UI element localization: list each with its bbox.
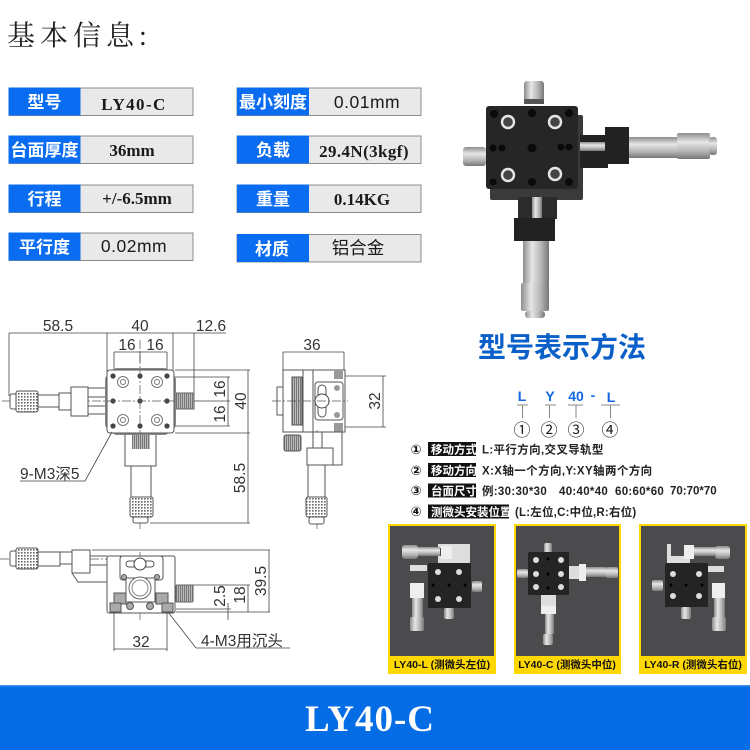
- bottom slider: [514, 197, 557, 241]
- front center line: [0, 552, 140, 620]
- plate: [665, 563, 708, 607]
- spec: model: [8, 88, 193, 116]
- side center line: [272, 401, 348, 530]
- spec: travel: 行程: [28, 190, 62, 209]
- spec: platform thickness: 台面厚度: [10, 140, 78, 160]
- callout: 4-M3 counterbore: 4-M3用沉头: [201, 632, 283, 650]
- left micrometer: [410, 565, 427, 631]
- callout: 4-M3 counterbore: [168, 612, 290, 650]
- circled numbers: ①: [514, 421, 530, 440]
- row 3: platform size: 60:60*60: [615, 486, 664, 498]
- circled numbers: ③: [568, 421, 584, 440]
- row 2: movement direction: X:X轴一个方向,Y:XY轴两个方向: [482, 464, 653, 478]
- circled numbers: ④: [602, 421, 618, 440]
- spec: material: 铝合金: [332, 238, 384, 258]
- front dimension lines: [92, 550, 270, 651]
- row 4: micrometer position: [410, 504, 636, 520]
- dimension lines top: [9, 333, 226, 396]
- bottom micrometer: [541, 595, 556, 645]
- spec: material: 材质: [255, 239, 289, 259]
- footer banner: [0, 685, 750, 750]
- side lower micrometer: [284, 432, 342, 524]
- left knob: [463, 147, 486, 166]
- front labels: 39.5: [253, 566, 270, 596]
- code letters: L: [518, 388, 527, 404]
- center lines: [2, 340, 198, 530]
- code letters: 40: [568, 388, 584, 404]
- row 3: platform size: 40:40*40: [559, 486, 608, 498]
- product photo: XY stage with micrometers: [463, 81, 717, 318]
- row 1: movement type: ①: [410, 443, 422, 458]
- front body: [107, 556, 175, 613]
- code letters: L: [607, 389, 616, 405]
- row 3: platform size: 例:30:30*30: [482, 484, 547, 498]
- front labels: [132, 566, 270, 651]
- spec: platform thickness: 36mm: [109, 141, 155, 160]
- photo card: LY40-L: [388, 524, 496, 674]
- top-view labels: [43, 318, 250, 493]
- row 4: micrometer position: (L:左位,C:中位,R:右位): [515, 505, 636, 519]
- upper micrometer: [402, 544, 470, 563]
- front labels: 18: [232, 586, 249, 604]
- model code diagram: [514, 387, 620, 440]
- top-view labels: 16: [212, 405, 229, 423]
- drawing: top view: [2, 318, 250, 530]
- row 2: movement direction: [410, 463, 653, 479]
- spec: model: LY40-C: [101, 95, 167, 114]
- code letters: -: [591, 387, 596, 403]
- drawing: front view: [0, 548, 290, 651]
- code letters: Y: [545, 388, 555, 404]
- top-view labels: 16: [212, 380, 229, 398]
- plate: [528, 552, 569, 595]
- circled numbers: [514, 421, 618, 440]
- row 3: platform size: ③: [410, 484, 422, 499]
- spec: model: 型号: [28, 93, 62, 112]
- side body: [277, 370, 345, 432]
- drawing: side view: [272, 337, 386, 530]
- row 3: platform size: [410, 484, 717, 499]
- knobs: [652, 580, 691, 619]
- notation list: [410, 442, 717, 520]
- right micrometer: [707, 566, 726, 631]
- top-view labels: 16: [146, 337, 164, 354]
- row 1: movement type: [410, 442, 604, 458]
- dimension lines right: [150, 370, 250, 523]
- front labels: 32: [132, 634, 150, 651]
- top-view labels: 58.5: [232, 463, 249, 493]
- title: 基本信息:: [7, 20, 152, 52]
- spec: material: [237, 234, 421, 262]
- bottom micrometer: [521, 241, 549, 318]
- side labels: [303, 337, 384, 410]
- right micrometer: [568, 564, 618, 581]
- top-view labels: 16: [118, 337, 136, 354]
- spec: parallelism: 0.02mm: [101, 236, 167, 256]
- row 1: movement type: 移动方式: [431, 442, 477, 456]
- stage base: [490, 115, 583, 200]
- top-view labels: 12.6: [196, 318, 226, 335]
- left micrometer: [10, 387, 107, 416]
- bottom micrometer: [125, 433, 156, 523]
- front micrometer: [10, 548, 107, 582]
- top-view labels: 40: [233, 392, 250, 410]
- spec: minimum scale: 最小刻度: [239, 92, 307, 112]
- spec: parallelism: [8, 232, 193, 260]
- row 4: micrometer position: 测微头安装位置: [431, 505, 512, 519]
- spec: parallelism: 平行度: [19, 238, 70, 257]
- side dimension lines: [283, 352, 386, 427]
- spec: weight: [237, 184, 421, 212]
- top knob: [524, 81, 544, 101]
- callout: 9-M3 holes: 9-M3深5: [20, 465, 79, 483]
- row 3: platform size: 70:70*70: [670, 486, 717, 498]
- row 1: movement type: L:平行方向,交叉导轨型: [482, 442, 604, 456]
- knobs: [517, 543, 552, 578]
- caption: LY40-L (测微头左位): [394, 658, 490, 671]
- side labels: 32: [367, 392, 384, 410]
- panel: specification table: [8, 88, 421, 262]
- circled numbers: ②: [540, 421, 558, 440]
- front knob: [176, 585, 193, 602]
- right micrometer: [629, 133, 717, 159]
- spec: travel: [8, 184, 193, 212]
- heading: model notation: 型号表示方法: [478, 332, 646, 363]
- callout: 9-M3 holes: [20, 432, 112, 483]
- spec: travel: +/-6.5mm: [102, 189, 172, 208]
- right slider: [580, 127, 629, 168]
- knobs: [444, 581, 482, 619]
- code brackets: [517, 405, 620, 418]
- top-view labels: 40: [131, 318, 149, 335]
- row 2: movement direction: 移动方向: [431, 464, 477, 478]
- plate: [428, 563, 471, 608]
- right knob: [176, 393, 194, 409]
- front labels: 2.5: [212, 585, 229, 607]
- upper micrometer: [667, 544, 730, 563]
- spec: weight: 重量: [256, 190, 290, 209]
- spec: load: 负载: [256, 141, 290, 160]
- photo card: LY40-R: [639, 524, 747, 674]
- photo card: LY40-C: [514, 524, 621, 674]
- spec: load: 29.4N(3kgf): [319, 142, 409, 161]
- spec: minimum scale: [237, 88, 421, 116]
- top plate with holes: [486, 106, 578, 189]
- spec: weight: 0.14KG: [334, 190, 390, 209]
- caption: LY40-R (测微头右位): [644, 658, 742, 671]
- top-view labels: 58.5: [43, 318, 73, 335]
- stage plate: [105, 368, 176, 435]
- row 3: platform size: 台面尺寸: [431, 484, 477, 498]
- side labels: 36: [303, 337, 321, 354]
- row 2: movement direction: ②: [410, 464, 422, 479]
- banner title: LY40-C: [305, 699, 435, 740]
- caption: LY40-C (测微头中位): [518, 658, 616, 671]
- spec: load: [237, 136, 421, 164]
- row 4: micrometer position: ④: [410, 505, 422, 520]
- code letters: [518, 387, 616, 405]
- spec: minimum scale: 0.01mm: [334, 92, 400, 112]
- spec: platform thickness: [8, 136, 193, 164]
